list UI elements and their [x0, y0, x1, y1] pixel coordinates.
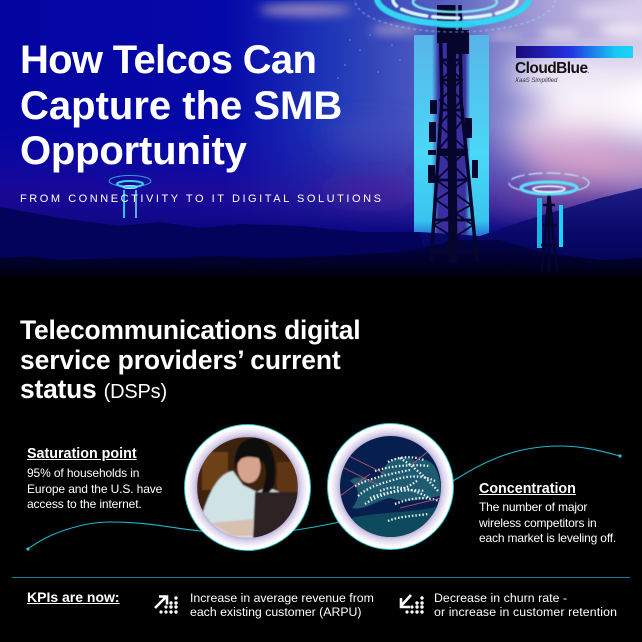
main tower hologram disc — [355, 0, 555, 32]
text: concentration body — [479, 500, 616, 545]
hero photo: sky, towers and hills — [0, 0, 642, 276]
title: How Telcos Can — [20, 38, 316, 82]
title: Capture the SMB — [20, 84, 342, 128]
KPI text: ARPU — [190, 591, 374, 618]
clouds — [320, 53, 642, 208]
KPI text: ARPU: each existing customer (ARPU) — [190, 604, 362, 618]
text: saturation point body — [27, 466, 162, 511]
logo: CloudBlue: CloudBlue. — [515, 60, 588, 77]
small hologram left — [109, 176, 151, 218]
section heading: service providers’ current — [20, 344, 341, 374]
logo tagline: XaaS Simplified — [515, 78, 557, 84]
hills — [0, 188, 642, 280]
heading: saturation point: Saturation point — [27, 446, 137, 462]
title — [20, 38, 342, 173]
photo circle: europe network map — [327, 423, 454, 550]
KPI label: KPIs are now: — [27, 589, 120, 605]
stars — [337, 34, 401, 79]
icon: arrow down with dots — [400, 594, 424, 614]
divider — [12, 577, 630, 578]
subtitle: FROM CONNECTIVITY TO IT DIGITAL SOLUTIONS — [20, 193, 384, 205]
text: concentration body: each market is leveling off. — [479, 531, 616, 545]
text: saturation point body: access to the internet. — [27, 497, 142, 511]
panel: concentration — [479, 481, 616, 545]
section heading — [20, 315, 360, 404]
photo circle: woman with laptop — [184, 424, 311, 551]
text: saturation point body: Europe and the U.S. have — [27, 482, 162, 496]
main tower — [428, 5, 478, 262]
heading: concentration: Concentration — [479, 481, 576, 497]
title: Opportunity — [20, 129, 247, 173]
text: concentration body: wireless competitors in — [479, 516, 596, 530]
panel: saturation point — [27, 446, 162, 511]
KPI text: ARPU: Increase in average revenue from — [190, 591, 374, 605]
KPI text: churn: Decrease in churn rate - — [434, 591, 567, 605]
icon: arrow up with dots — [154, 595, 178, 614]
text: saturation point body: 95% of households in — [27, 466, 139, 480]
main beam — [414, 35, 489, 273]
text: concentration body: The number of major — [479, 500, 587, 514]
KPI text: churn: or increase in customer retention — [434, 604, 617, 618]
small tower right — [509, 173, 589, 272]
KPI text: churn — [434, 591, 617, 618]
section heading: Telecommunications digital — [20, 315, 360, 345]
logo bar — [516, 46, 633, 58]
section heading: status (DSPs) — [20, 374, 167, 404]
